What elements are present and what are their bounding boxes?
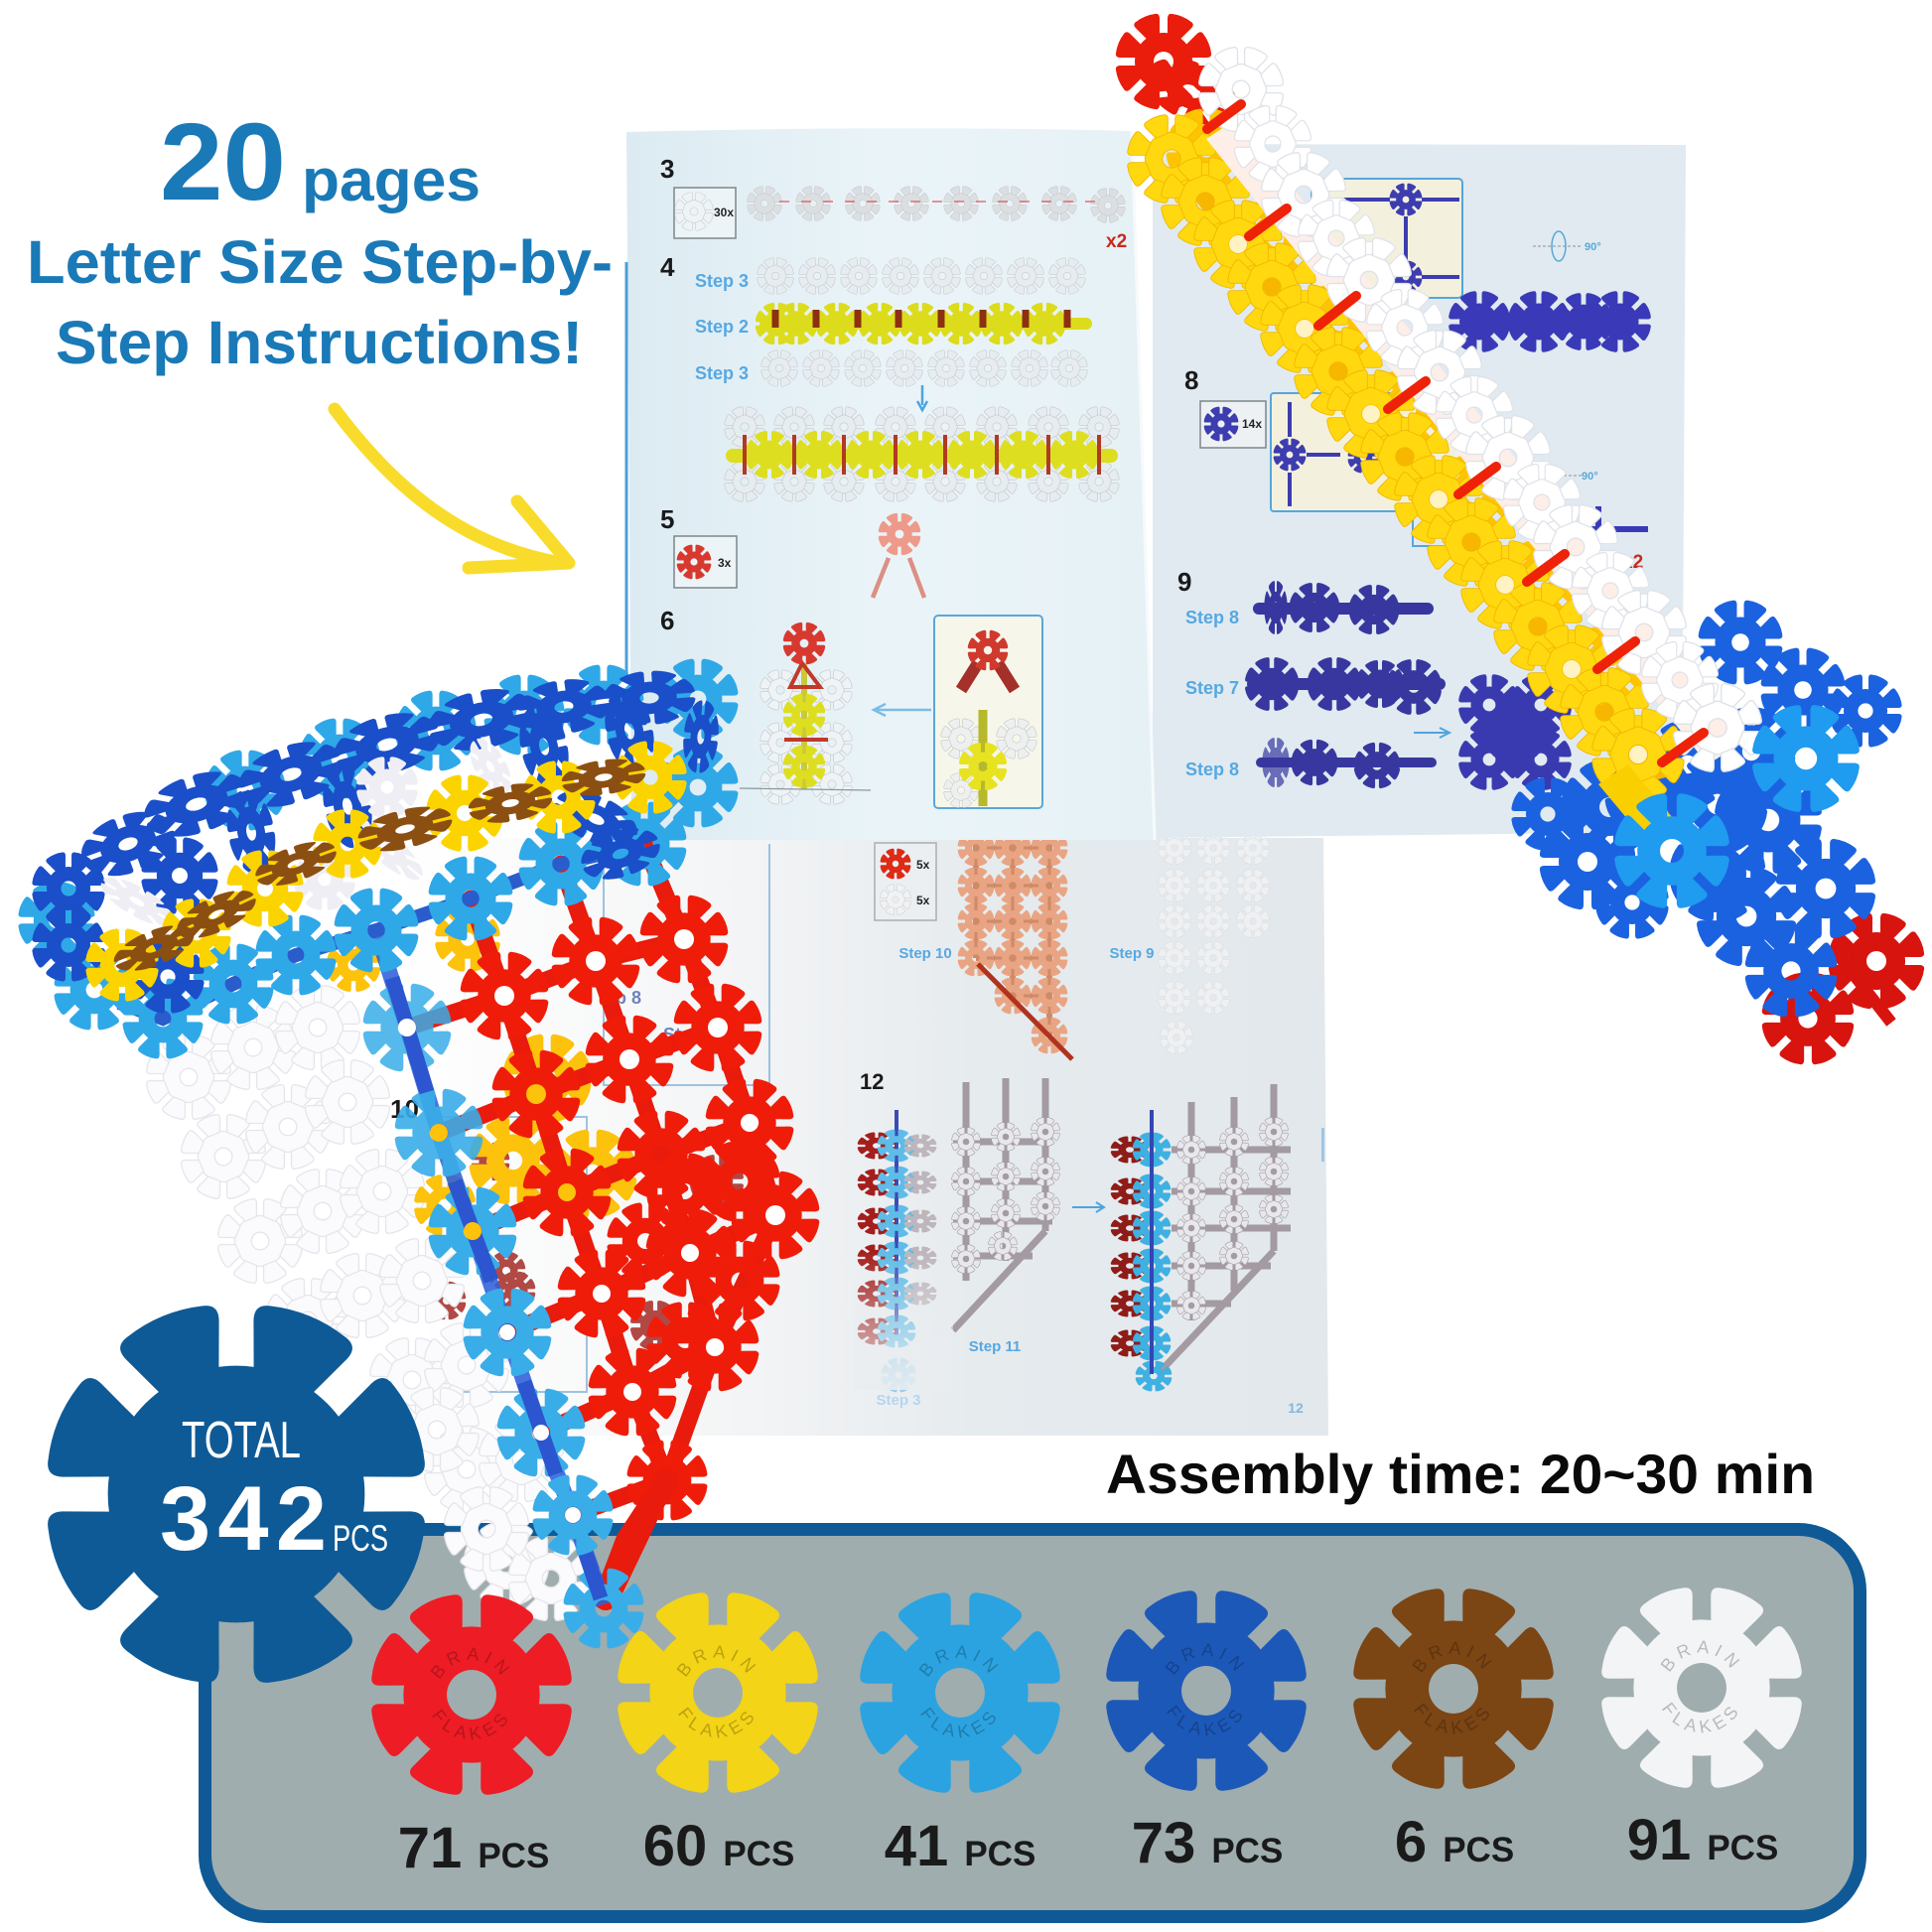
rocket tail blue flakes <box>1510 599 1903 940</box>
white flake wall <box>145 984 595 1622</box>
step 8: 14x <box>1242 417 1262 431</box>
white body pad <box>1206 119 1747 764</box>
orange-yellow flakes behind <box>326 905 638 1237</box>
step 9: Step 7 <box>1185 678 1239 698</box>
lower-left page text: Ste <box>663 1025 691 1044</box>
page edge tab <box>1321 1128 1324 1162</box>
headline: 20 pages: 20 <box>160 101 286 223</box>
pieces panel background <box>205 1529 1861 1916</box>
piece: light blue flake <box>860 1592 1060 1793</box>
count: 6 brown: 6 PCS <box>1395 1810 1514 1874</box>
red cross rods <box>1207 104 1704 762</box>
rocket nose red flakes <box>1114 12 1250 140</box>
lower instruction booklet <box>390 829 1328 1436</box>
yellow tail piece <box>1598 764 1678 844</box>
PCS unit: PCS <box>333 1518 388 1559</box>
upper instruction booklet <box>626 128 1686 840</box>
red edge-on tail <box>606 1480 667 1598</box>
step 5 <box>660 504 924 598</box>
badge flake shape <box>39 1297 434 1692</box>
count: 73 dark blue: 73 PCS <box>1132 1811 1283 1875</box>
headline: pages: pages <box>302 147 481 213</box>
white inner pieces <box>93 731 520 935</box>
rocket fin blue flakes <box>1695 837 1877 1019</box>
step 5: 3x <box>718 556 732 570</box>
part box: 5x red and 5x clear <box>875 843 936 920</box>
lower-left page text <box>390 988 691 1124</box>
arrow to assembled step 12 <box>1072 1202 1104 1212</box>
piece: dark blue flake: BRAIN <box>1166 1644 1245 1675</box>
headline <box>27 101 613 376</box>
step 8 <box>1184 365 1499 546</box>
step 4: 4 <box>660 252 675 282</box>
assembly time: Assembly time: 20~30 min <box>1106 1443 1815 1505</box>
piece: red flake: FLAKES <box>432 1710 507 1739</box>
yellow body flakes <box>1126 113 1686 802</box>
part box: 5x red and 5x clear: 5x <box>916 894 930 907</box>
lower-left page text: ep 8 <box>606 988 641 1008</box>
page number 12: 12 <box>1288 1400 1304 1416</box>
indigo fragment <box>1579 506 1648 541</box>
spine flake centres <box>398 1019 581 1523</box>
left page <box>626 128 1155 840</box>
spine edge <box>1132 131 1155 840</box>
lower dark blue row <box>119 844 644 1019</box>
step 12 right diagram <box>1110 1084 1291 1392</box>
step 6: 6 <box>660 606 674 635</box>
rotate 90 icon, upper: 90° <box>1585 241 1601 253</box>
step 8: 8 <box>1184 365 1198 395</box>
step 4: Step 2 <box>695 317 749 337</box>
piece: light blue flake: BRAIN <box>919 1646 999 1677</box>
right model: rocket of flakes <box>1114 12 1926 1066</box>
step 4 <box>660 252 1120 502</box>
step 11 label: Step 11 <box>969 1338 1021 1355</box>
step 7 inset box <box>1311 179 1462 298</box>
lower booklet pages <box>397 838 1328 1436</box>
yellow arrow to booklet <box>335 409 569 568</box>
red flakes <box>459 894 821 1522</box>
piece: yellow flake <box>618 1592 818 1793</box>
342 count: 342 <box>160 1468 327 1570</box>
step 3: 3 <box>660 154 674 184</box>
piece: light blue flake: FLAKES <box>920 1708 996 1737</box>
step 3: 30x <box>714 206 734 219</box>
red connector rods <box>407 844 775 1588</box>
dark blue rim links <box>31 666 722 1015</box>
step 9 label: Step 9 <box>1109 945 1155 962</box>
headline: line 2: Letter Size Step-by- <box>27 228 613 296</box>
part box: 5x red and 5x clear: 5x <box>916 858 930 872</box>
piece: red flake <box>371 1594 572 1795</box>
step 4: Step 3 <box>695 271 749 291</box>
pale holes in yellow body <box>1229 235 1647 763</box>
yellow inner flakes <box>84 740 688 1003</box>
piece: yellow flake: FLAKES <box>678 1708 754 1737</box>
rocket base light blue flakes <box>1611 703 1862 911</box>
piece: dark blue flake: FLAKES <box>1167 1706 1242 1735</box>
red centres showing yellow <box>526 1084 576 1201</box>
piece: white flake <box>1601 1587 1802 1788</box>
count: 60 yellow: 60 PCS <box>643 1814 794 1878</box>
white body flakes <box>1197 46 1763 773</box>
lower-left page small red diagram <box>427 1142 745 1351</box>
light blue spine flakes <box>361 982 645 1650</box>
x2 multiplier: x2 <box>1622 552 1643 573</box>
step 10 label: Step 10 <box>898 945 952 962</box>
piece: white flake: BRAIN <box>1660 1640 1739 1672</box>
piece: brown flake: FLAKES <box>1414 1704 1489 1733</box>
step 10 salmon grid <box>957 829 1072 1059</box>
rotate 90 icon, lower <box>1559 471 1598 483</box>
yellow body back layer <box>1165 107 1650 707</box>
step 3 <box>660 154 1127 252</box>
rotate 90 icon, lower: 90° <box>1582 471 1598 483</box>
headline: line 3: Step Instructions! <box>56 309 583 376</box>
piece: yellow flake: BRAIN <box>677 1646 757 1677</box>
rocket fin red flakes <box>1760 911 1926 1066</box>
step 9: Step 8 <box>1185 608 1239 627</box>
lower booklet left-page boxes <box>427 844 769 1392</box>
right page <box>1153 144 1686 838</box>
step 9: Step 8 <box>1185 759 1239 779</box>
count: 91 white: 91 PCS <box>1627 1808 1778 1872</box>
step 9: 9 <box>1177 567 1191 597</box>
step 5: 5 <box>660 504 674 534</box>
piece: red flake: BRAIN <box>431 1648 510 1679</box>
piece: brown flake: BRAIN <box>1412 1642 1491 1673</box>
light blue rim flakes <box>17 657 740 1060</box>
dark blue spine rods <box>376 930 604 1604</box>
rotate 90 icon, upper <box>1533 231 1601 261</box>
count: 71 red: 71 PCS <box>398 1816 549 1880</box>
piece: white flake: FLAKES <box>1662 1702 1737 1733</box>
yellow body shadow <box>1172 149 1678 784</box>
TOTAL label: TOTAL <box>182 1412 301 1469</box>
piece: brown flake <box>1353 1588 1554 1789</box>
step 9 <box>1177 567 1573 791</box>
left edge colour strip <box>625 262 627 675</box>
indigo chain <box>1448 290 1652 353</box>
step 3 faded label: Step 3 <box>876 1392 921 1409</box>
left model: basket of flakes <box>17 657 821 1650</box>
red flake centre holes <box>494 929 785 1489</box>
count: 41 light blue: 41 PCS <box>885 1814 1035 1878</box>
step 12 left diagram <box>854 1078 1060 1393</box>
step 3: x2 <box>1106 231 1127 252</box>
total badge <box>39 1297 434 1692</box>
step number 12: 12 <box>860 1069 884 1094</box>
brown links <box>106 754 649 981</box>
lower-left page text: 10 <box>390 1094 419 1124</box>
step 9 faint grid <box>1158 831 1270 1054</box>
step 4: Step 3 <box>695 363 749 383</box>
dark rods over spine flakes <box>392 978 601 1598</box>
piece: dark blue flake <box>1106 1590 1307 1791</box>
step 6 <box>660 606 1042 808</box>
